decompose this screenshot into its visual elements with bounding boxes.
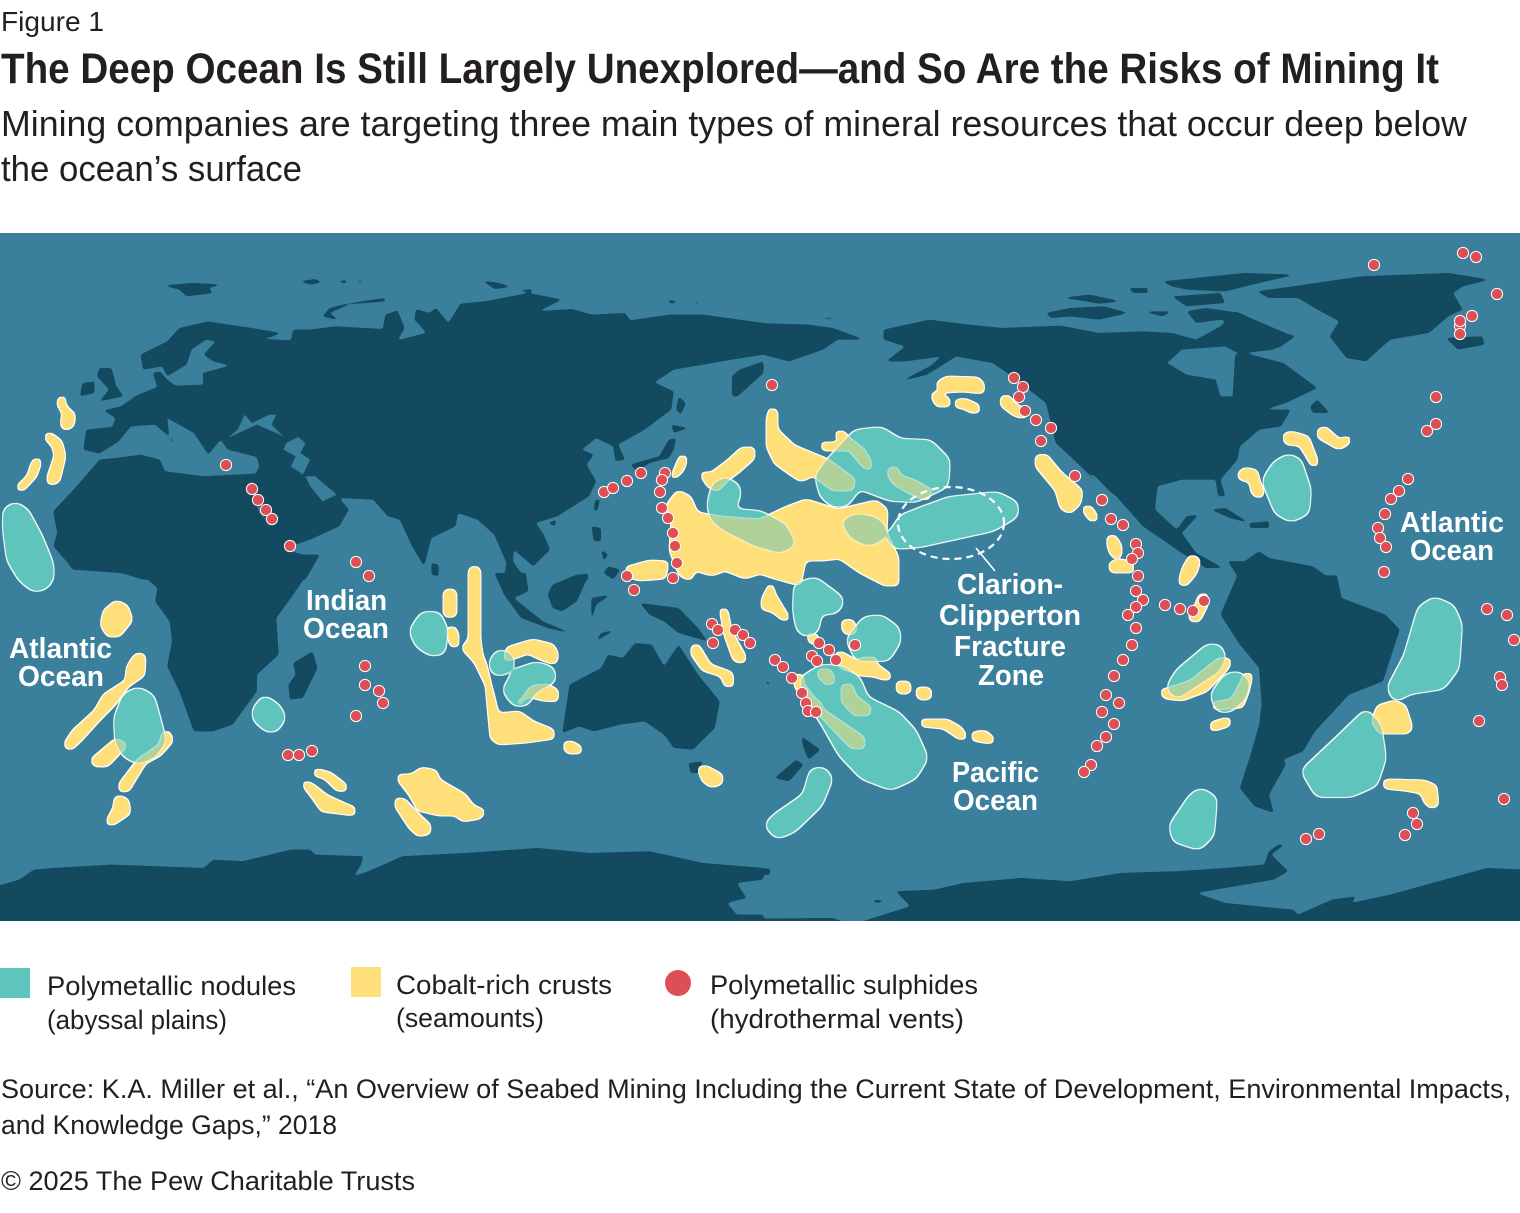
Hudson Bay: [1090, 346, 1237, 503]
label: Clarion-Clipperton Fracture Zone: Clarion-: [957, 569, 1063, 601]
polymetallic sulphide vents: [220, 247, 1520, 845]
legend: cobalt-rich crusts: (seamounts): [396, 1003, 544, 1033]
overlap tint of crusts over nodules: [16, 377, 1438, 836]
legend: polymetallic sulphides: (hydrothermal vents): [710, 1004, 964, 1034]
label: Pacific Ocean: Ocean: [953, 785, 1038, 817]
land: South America, New Zealand, East Antarctica: [756, 575, 1520, 925]
label: Pacific Ocean: Pacific: [952, 757, 1039, 789]
land: Eurasia and Africa north: [53, 279, 763, 580]
label: Atlantic Ocean west: Atlantic: [9, 633, 112, 665]
subtitle: [1, 103, 1468, 189]
cobalt-rich crust deposits: [16, 377, 1438, 836]
callout: Clarion-Clipperton dashed ring and leader: [898, 487, 1004, 571]
subtitle: Mining companies are targeting three main types of mineral resources that occur deep below: [1, 103, 1468, 144]
legend: polymetallic sulphides: [665, 970, 978, 1034]
legend: polymetallic nodules: [0, 968, 296, 1035]
source note: [1, 1074, 1511, 1140]
legend: polymetallic nodules: Polymetallic nodules: [47, 971, 296, 1001]
legend: polymetallic sulphides: Polymetallic sulphides: [710, 970, 978, 1000]
label: Clarion-Clipperton Fracture Zone: Zone: [978, 660, 1044, 692]
label: Indian Ocean: Indian: [306, 585, 387, 617]
label: Atlantic Ocean east: Atlantic: [1400, 507, 1504, 539]
legend: cobalt-rich crusts: Cobalt-rich crusts: [396, 970, 612, 1000]
legend: cobalt-rich crusts: [351, 967, 612, 1033]
label: Clarion-Clipperton Fracture Zone: Fracture: [954, 631, 1066, 663]
label: Pacific Ocean: [954, 761, 1038, 810]
label: Atlantic Ocean east: Ocean: [1410, 535, 1494, 567]
label: Clarion-Clipperton Fracture Zone: Clipperton: [939, 600, 1081, 632]
polymetallic nodule deposits: [4, 428, 1461, 849]
label: Atlantic Ocean west: [10, 637, 112, 686]
label: Indian Ocean: Ocean: [303, 613, 389, 645]
land: North America and Greenland: [756, 273, 1489, 580]
label: Atlantic Ocean west: Ocean: [18, 661, 104, 693]
subtitle: the ocean’s surface: [1, 148, 302, 189]
figure label: Figure 1: [1, 6, 104, 37]
panel: world map: [0, 233, 1520, 925]
inland seas: [167, 415, 337, 501]
source note: and Knowledge Gaps,” 2018: [1, 1110, 337, 1140]
source note: Source: K.A. Miller et al., “An Overview of Seabed Mining Including the Current State of Development, Environmental Impacts,: [1, 1074, 1511, 1104]
legend: polymetallic nodules: (abyssal plains): [47, 1005, 227, 1035]
label: Atlantic Ocean east: [1400, 511, 1504, 560]
land masses: [0, 273, 1520, 925]
land: Africa south, Australia, Asia islands, West Antarctica: [0, 573, 763, 925]
copyright: © 2025 The Pew Charitable Trusts: [1, 1166, 415, 1196]
label: Indian Ocean: [304, 589, 388, 638]
ocean background: [0, 233, 1520, 921]
label: Clarion-Clipperton Fracture Zone: [940, 573, 1080, 686]
